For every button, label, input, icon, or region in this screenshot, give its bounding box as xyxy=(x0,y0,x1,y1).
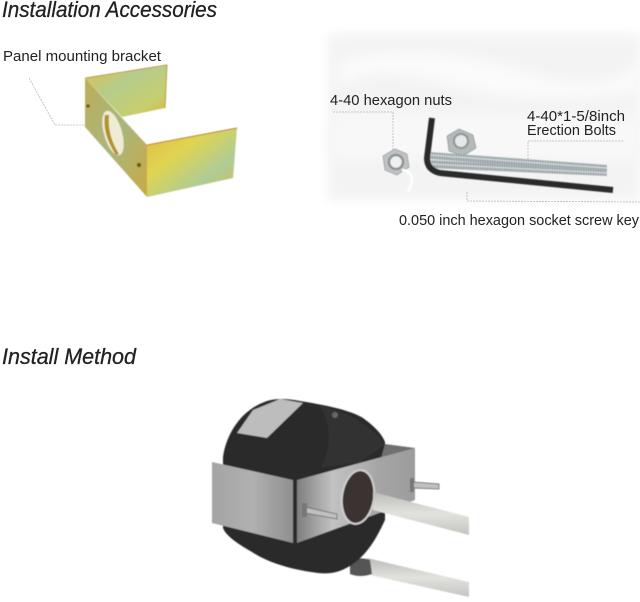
label: 4-40 hexagon nuts: 4-40 hexagon nuts xyxy=(330,92,452,109)
icon: encoder label xyxy=(237,399,303,438)
photo: plastic bag background xyxy=(328,34,640,200)
leader lines: hardware xyxy=(333,112,640,202)
label: 4-40*1-5/8inch Erection Bolts: 4-40*1-5/8inch xyxy=(527,108,625,125)
label: Panel mounting bracket: Panel mounting bracket xyxy=(3,48,162,65)
text: Erection Bolts xyxy=(527,122,616,139)
icon: bracket left face xyxy=(212,462,293,543)
icon: screws xyxy=(302,478,439,519)
icon: hardware set of nuts, bolts and hex key xyxy=(383,118,613,192)
icon: upper nut xyxy=(447,129,476,156)
icon: erection bolts xyxy=(430,152,607,176)
icon: lower nut xyxy=(383,149,412,192)
icon: bracket right face xyxy=(297,448,415,543)
icon: panel mounting bracket xyxy=(85,65,237,197)
icon: mounting hole xyxy=(337,467,379,527)
icon: bracket back edge xyxy=(380,444,415,462)
photo: encoder mounted in bracket xyxy=(212,399,469,597)
icon: encoder body xyxy=(223,399,385,573)
icon: lower cable xyxy=(350,558,469,597)
title: Install Method: Install Method xyxy=(2,344,137,369)
icon: upper cable xyxy=(373,492,469,535)
leader line: bracket xyxy=(29,78,85,125)
icon: hexagon socket screw key xyxy=(427,118,613,190)
